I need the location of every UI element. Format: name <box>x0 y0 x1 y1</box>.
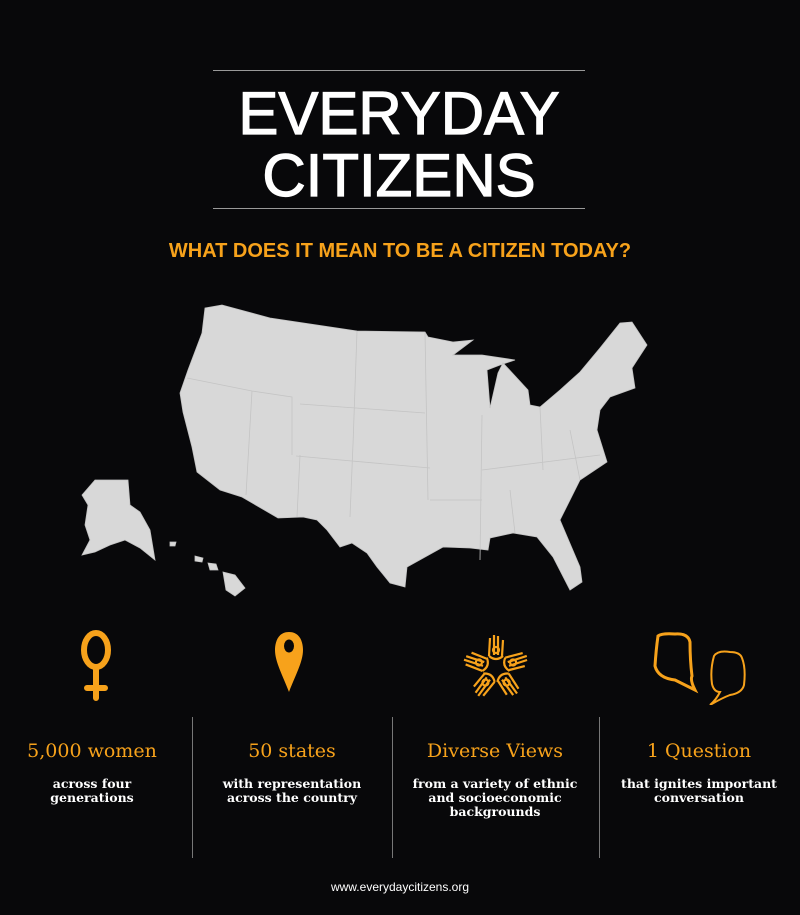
stat: states <box>222 740 361 805</box>
title: CITIZENS <box>262 142 536 209</box>
stat: states: across the country <box>227 790 357 805</box>
stat: question <box>621 740 777 805</box>
title <box>213 70 585 209</box>
stat: views: Diverse Views <box>427 740 563 762</box>
stat: states: 50 states <box>248 740 336 762</box>
footer url: www.everydaycitizens.org <box>331 880 469 894</box>
stat: views: backgrounds <box>450 804 540 819</box>
stat: question: 1 Question <box>647 740 751 762</box>
stat: question: that ignites important <box>621 776 777 791</box>
icon: venus <box>81 630 111 701</box>
stat: states: with representation <box>223 776 361 791</box>
stat: views <box>413 740 577 819</box>
stat: views: and socioeconomic <box>428 790 562 805</box>
subtitle: WHAT DOES IT MEAN TO BE A CITIZEN TODAY? <box>169 240 631 262</box>
icon: map pin <box>275 632 303 692</box>
stat: women: generations <box>50 790 134 805</box>
stat: women: across four <box>53 776 131 791</box>
stat: question: conversation <box>654 790 744 805</box>
map <box>81 304 648 596</box>
title: EVERYDAY <box>238 80 560 147</box>
icon: hands star <box>464 635 528 696</box>
stat: women <box>27 740 157 805</box>
stat: views: from a variety of ethnic <box>413 776 577 791</box>
icon: speech bubbles <box>654 632 746 705</box>
stat: women: 5,000 women <box>27 740 157 762</box>
